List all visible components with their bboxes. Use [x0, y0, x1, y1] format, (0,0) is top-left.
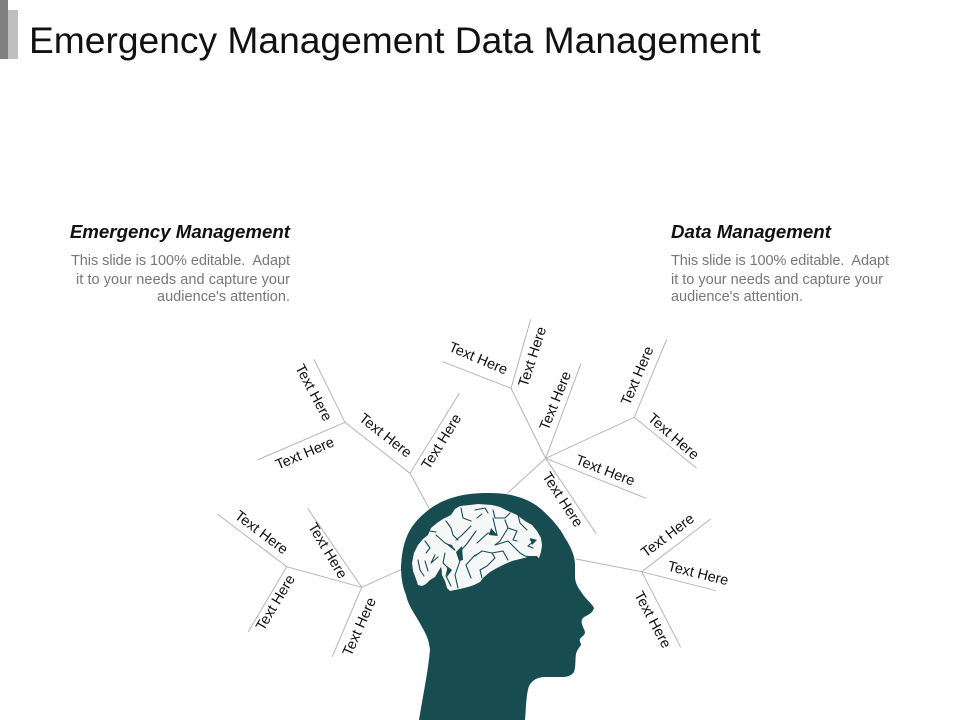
description: emergency management: audience's attention.: [157, 289, 290, 305]
icon: head silhouette with brain: [401, 493, 594, 720]
labels: lower left tree: Text Here: [231, 508, 291, 558]
labels: lower right tree: Text Here: [630, 589, 674, 651]
heading: data management: Data Management: [671, 221, 832, 242]
labels: upper left tree: Text Here: [419, 411, 465, 473]
description: data management: it to your needs and capture your: [671, 272, 883, 288]
labels: lower left tree: Text Here: [304, 520, 350, 582]
branch lines: lower right tree: [576, 519, 716, 647]
brain: [412, 504, 542, 591]
text block: emergency management: [70, 221, 291, 305]
labels: upper left tree: Text Here: [273, 435, 337, 473]
labels: lower right tree: Text Here: [666, 559, 730, 589]
description: data management: This slide is 100% editable. Adapt: [671, 253, 889, 269]
labels: upper right tree: Text Here: [573, 452, 637, 490]
labels: lower right tree: Text Here: [638, 511, 698, 561]
labels: lower left tree: Text Here: [340, 595, 380, 659]
labels: upper right tree: Text Here: [644, 411, 702, 463]
labels: lower left tree: [231, 508, 380, 659]
description: emergency management: [71, 253, 290, 305]
labels: upper left tree: [273, 362, 465, 473]
labels: upper left tree: Text Here: [356, 411, 414, 461]
branch lines: lower left tree: [217, 508, 402, 657]
labels: lower left tree: Text Here: [253, 572, 299, 634]
branch lines: upper left tree: [257, 359, 459, 510]
labels: upper right tree: Text Here: [446, 340, 510, 378]
labels: upper right tree: Text Here: [538, 470, 586, 530]
description: data management: audience's attention.: [671, 289, 803, 305]
branch lines: upper right tree: [443, 319, 697, 533]
header accent bars: [0, 0, 18, 59]
title: Emergency Management Data Management: [29, 19, 761, 61]
head silhouette: [401, 493, 594, 720]
description: data management: [671, 253, 889, 305]
text block: data management: [671, 221, 889, 305]
description: emergency management: it to your needs and capture your: [76, 272, 290, 288]
heading: emergency management: Emergency Management: [70, 221, 291, 242]
labels: upper right tree: Text Here: [619, 344, 657, 408]
labels: upper left tree: Text Here: [291, 362, 335, 424]
labels: upper right tree: Text Here: [537, 369, 575, 433]
description: emergency management: This slide is 100% editable. Adapt: [71, 253, 290, 269]
labels: lower right tree: [630, 511, 730, 651]
labels: upper right tree: Text Here: [516, 325, 550, 389]
labels: upper right tree: [446, 325, 702, 530]
